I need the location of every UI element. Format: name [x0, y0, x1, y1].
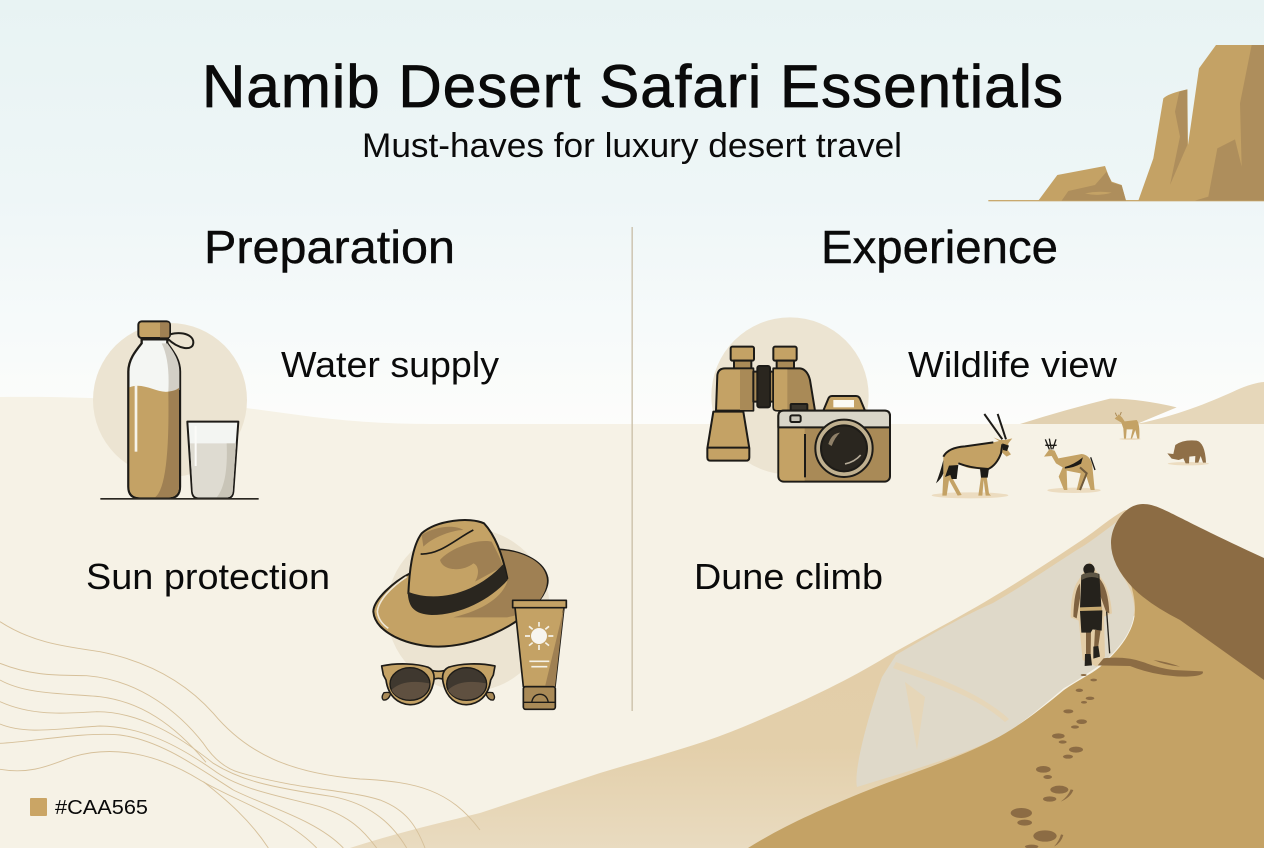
hat brim — [373, 549, 548, 647]
sunscreen tube — [515, 607, 564, 687]
backdrop circle — [387, 528, 550, 692]
sun emblem — [525, 622, 553, 667]
dune shadow face — [1111, 504, 1264, 680]
hiker and footprints — [1011, 562, 1203, 848]
bottle — [128, 339, 180, 498]
swatch label: #CAA565 — [55, 797, 148, 819]
camera — [778, 396, 890, 482]
large dune — [350, 504, 1264, 848]
binoculars — [707, 347, 815, 461]
subtitle: Must-haves for luxury desert travel — [362, 127, 902, 165]
title: Namib Desert Safari Essentials — [202, 53, 1063, 120]
dune main sunlit sand — [748, 585, 1264, 848]
background rock formations — [988, 45, 1264, 201]
other wildlife — [1044, 412, 1209, 493]
contour lines — [0, 622, 480, 848]
hat band — [408, 564, 508, 615]
background desert floor — [0, 397, 1264, 848]
distant dunes — [1020, 382, 1264, 424]
swatch — [30, 798, 47, 816]
label: Dune climb: Dune climb — [694, 556, 883, 597]
dune lit face — [350, 510, 1145, 848]
animal: small antelope — [1115, 412, 1141, 440]
hiker shadow — [1095, 658, 1203, 677]
backdrop circle — [93, 323, 247, 477]
ground line — [100, 498, 259, 500]
heading: Experience: Experience — [821, 221, 1058, 273]
animal: gazelle — [1044, 439, 1101, 493]
label: Sun protection: Sun protection — [86, 556, 330, 597]
backdrop circle — [711, 317, 869, 475]
dune wind streaks — [893, 662, 1009, 750]
glass — [187, 422, 238, 498]
bottle loop — [167, 333, 193, 348]
colour legend — [30, 797, 148, 819]
animal: rhino — [1167, 440, 1209, 465]
sunglasses — [382, 664, 495, 705]
dune pale patch — [856, 518, 1134, 787]
hiker — [1071, 562, 1112, 667]
background sky — [0, 0, 1264, 430]
label: Wildlife view: Wildlife view — [908, 344, 1118, 385]
icon: hat, sunglasses and sunscreen — [373, 520, 566, 709]
hat crown — [408, 520, 507, 599]
bottle cap — [138, 321, 170, 338]
center divider — [632, 227, 633, 711]
icon: water bottle and glass — [93, 321, 259, 500]
label: Water supply: Water supply — [281, 344, 499, 385]
heading: Preparation: Preparation — [204, 221, 455, 273]
footprints — [1011, 674, 1097, 848]
animal: oryx — [932, 414, 1012, 498]
icon: binoculars and camera — [707, 317, 890, 482]
